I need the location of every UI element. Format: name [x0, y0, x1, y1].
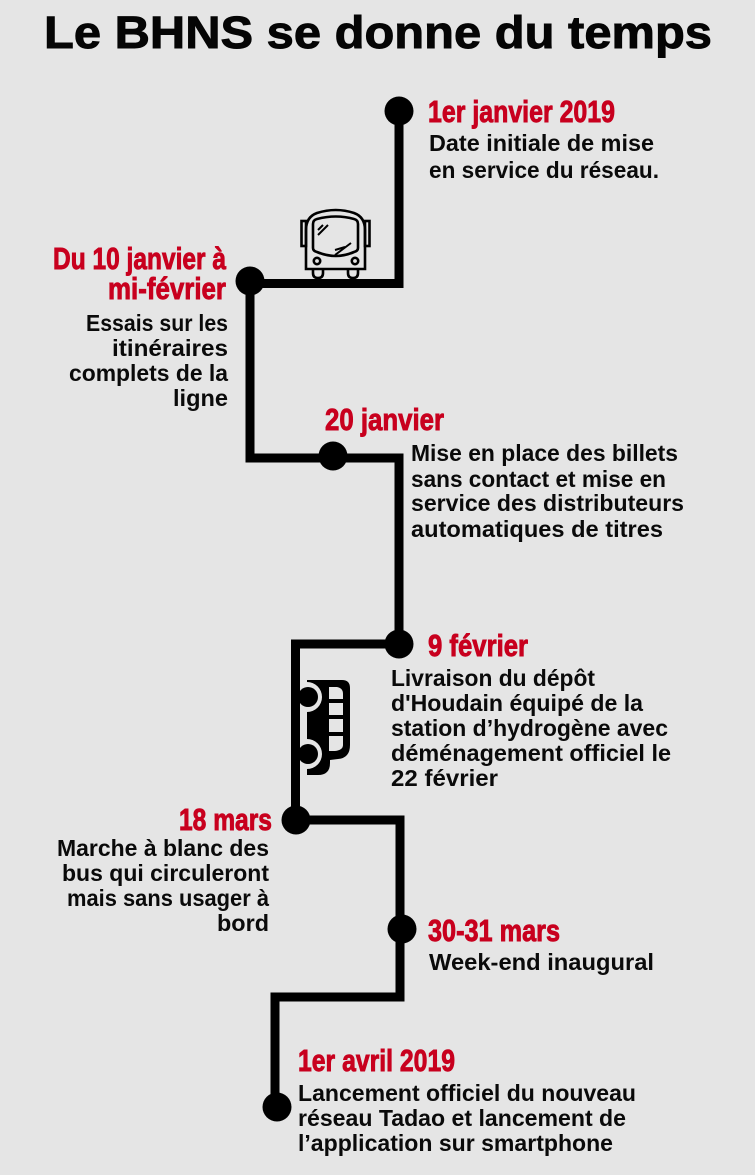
event: 1er janvier 2019 [428, 94, 659, 183]
event: 1er janvier 2019: 1er janvier 2019 [428, 94, 615, 129]
event: 1er janvier 2019: Date initiale de mise [429, 130, 654, 156]
event: 9 février: d'Houdain équipé de la [391, 690, 644, 716]
event: du 10 janvier à mi-février: Essais sur les [86, 310, 228, 336]
event: du 10 janvier à mi-février: mi-février [108, 271, 226, 306]
event: 30-31 mars: 30-31 mars [428, 913, 560, 948]
event: 30-31 mars: Week-end inaugural [429, 949, 654, 975]
title: Le BHNS se donne du temps [44, 7, 712, 58]
event: 9 février: 9 février [428, 628, 528, 663]
icon: bus front view [302, 210, 370, 278]
event: 1er janvier 2019: en service du réseau. [429, 157, 659, 183]
event: 20 janvier: Mise en place des billets [411, 440, 678, 466]
event: 18 mars: Marche à blanc des [57, 835, 269, 861]
timeline line [236, 96, 416, 1122]
event: 1er avril 2019: l’application sur smartphone [298, 1130, 613, 1156]
event: 9 février: station d’hydrogène avec [391, 715, 668, 741]
event: 1er avril 2019: Lancement officiel du nouveau [298, 1080, 636, 1106]
event: 18 mars: mais sans usager à [67, 885, 270, 911]
event: 18 mars: bord [217, 910, 269, 936]
event: 9 février [391, 628, 671, 791]
event: du 10 janvier à mi-février: ligne [173, 385, 228, 411]
event: 9 février: Livraison du dépôt [391, 665, 595, 691]
event: du 10 janvier à mi-février: itinéraires [112, 335, 228, 361]
event: 9 février: déménagement officiel le [391, 740, 671, 766]
event: 18 mars: bus qui circuleront [62, 860, 269, 886]
event: du 10 janvier à mi-février [53, 241, 229, 411]
event: 1er avril 2019 [298, 1043, 636, 1156]
event: 20 janvier: 20 janvier [325, 402, 444, 437]
event: 18 mars [57, 802, 272, 936]
event: du 10 janvier à mi-février: Du 10 janvier à [53, 241, 227, 276]
event: 20 janvier: sans contact et mise en [411, 466, 666, 492]
event: 30-31 mars [428, 913, 654, 975]
event: 9 février: 22 février [391, 765, 498, 791]
event: du 10 janvier à mi-février: complets de la [69, 360, 229, 386]
icon: bus side view [298, 680, 350, 775]
event: 20 janvier: automatiques de titres [411, 516, 663, 542]
event: 1er avril 2019: 1er avril 2019 [298, 1043, 455, 1078]
event: 20 janvier [325, 402, 684, 542]
event: 20 janvier: service des distributeurs [411, 490, 684, 516]
event: 1er avril 2019: réseau Tadao et lancement de [298, 1105, 626, 1131]
event: 18 mars: 18 mars [179, 802, 272, 837]
